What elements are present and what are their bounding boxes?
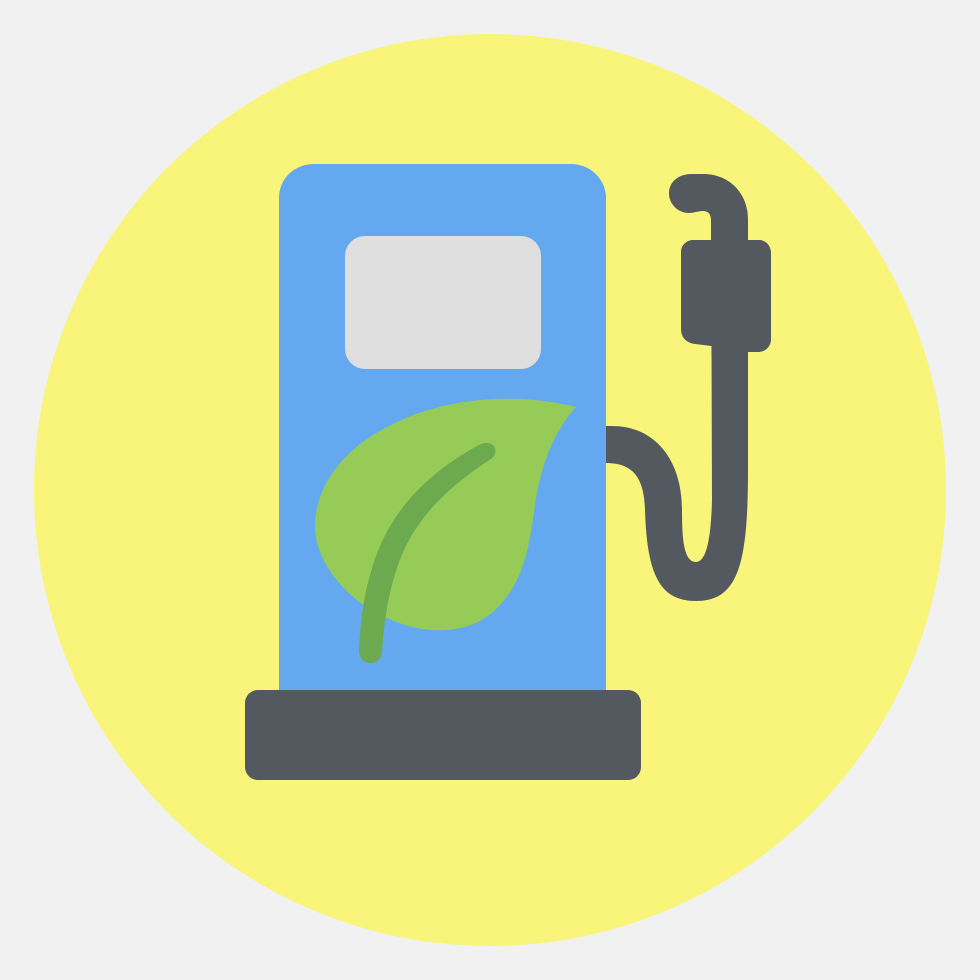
nozzle xyxy=(669,174,771,355)
leaf xyxy=(315,399,576,630)
pump body xyxy=(279,164,606,700)
fuel hose xyxy=(606,340,748,601)
pump base xyxy=(245,690,641,780)
leaf vein xyxy=(359,443,495,663)
pump display screen xyxy=(345,236,541,369)
